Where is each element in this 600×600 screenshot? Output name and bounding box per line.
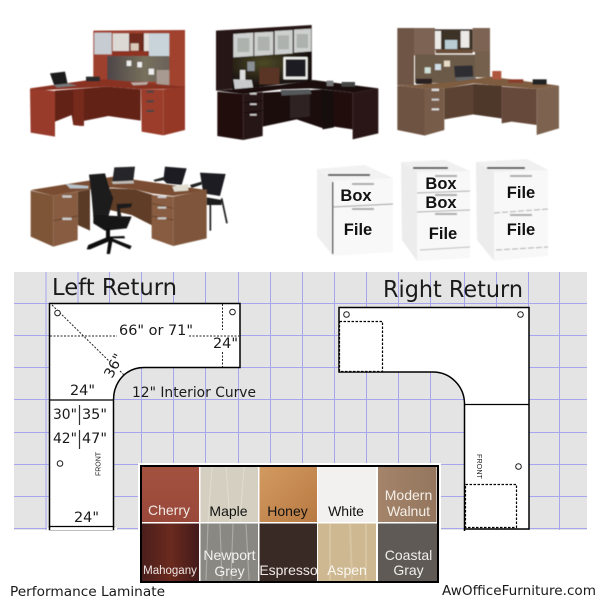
- swatch: Espresso: Espresso: [259, 562, 318, 578]
- swatch: White: White: [328, 503, 364, 519]
- swatch: Aspen: Aspen: [327, 562, 367, 578]
- heading: Left Return: Left Return: [52, 275, 177, 301]
- photo: white pedestal file/file: File: [507, 184, 535, 202]
- photo: cherry L-desk with hutch: [30, 30, 185, 137]
- swatch: Honey: [260, 467, 317, 522]
- swatch: Coastal Gray: [378, 524, 437, 581]
- swatch: Coastal Gray: Gray: [393, 562, 424, 578]
- swatch: Mahogany: [142, 524, 199, 581]
- panel: laminate colour swatches: [138, 463, 441, 583]
- label: diagonal: 36": [101, 351, 127, 381]
- photo: white pedestal box/box/file: [401, 160, 470, 261]
- swatch: Maple: [200, 467, 258, 522]
- photo: white pedestal box/file: Box: [340, 187, 372, 205]
- swatch: Espresso: [259, 524, 318, 581]
- label: front: FRONT: [475, 454, 484, 479]
- photo: walnut L-desk with hutch: [397, 28, 559, 136]
- swatch: Newport Grey: Newport: [203, 547, 256, 563]
- caption: website: AwOfficeFurniture.com: [442, 584, 596, 599]
- swatch: Newport Grey: [200, 524, 258, 581]
- photo: espresso L-desk with hutch: [216, 25, 378, 140]
- swatch: Aspen: [318, 524, 376, 581]
- swatch: Cherry: [142, 467, 199, 522]
- label: width: 66" or 71": [119, 323, 193, 339]
- label: 35 inch: 35": [82, 407, 107, 423]
- label: main depth: 24": [70, 383, 95, 399]
- swatch: Modern Walnut: Walnut: [387, 503, 430, 519]
- diagram: right return desk plan: [339, 308, 529, 531]
- floor plan grid background: [14, 272, 587, 530]
- swatch: Modern Walnut: Modern: [385, 487, 432, 503]
- swatch: White: [318, 467, 376, 522]
- label: 30 inch: 30": [53, 407, 77, 423]
- label: 42 inch: 42": [53, 431, 77, 447]
- heading: Right Return: Right Return: [383, 277, 523, 303]
- label: return depth: 24": [213, 336, 238, 352]
- label: bottom depth: 24": [74, 510, 99, 526]
- caption: Performance Laminate: Performance Laminate: [10, 585, 165, 600]
- label: front: FRONT: [94, 452, 102, 476]
- swatch: Newport Grey: Grey: [214, 563, 245, 579]
- label: interior curve: 12" Interior Curve: [132, 385, 256, 401]
- photo: white pedestal box/box/file: Box: [425, 175, 457, 193]
- swatch: Honey: Honey: [267, 503, 308, 519]
- photo: white pedestal box/box/file: File: [429, 225, 457, 243]
- swatch: Modern Walnut: [378, 467, 436, 522]
- swatch: Cherry: Cherry: [148, 502, 190, 518]
- photo: white pedestal box/file: File: [344, 221, 372, 239]
- swatch: Coastal Gray: Coastal: [385, 547, 432, 563]
- diagram: left return desk plan: [47, 304, 256, 530]
- photo: white pedestal file/file: [476, 159, 548, 261]
- swatch: Mahogany: Mahogany: [143, 565, 197, 577]
- photo: walnut bow-front desk with chairs: [31, 167, 227, 254]
- photo: white pedestal file/file: File: [507, 221, 535, 239]
- label: 47 inch: 47": [82, 431, 107, 447]
- photo: white pedestal box/box/file: Box: [425, 194, 457, 212]
- photo: white pedestal box/file: [317, 165, 393, 256]
- swatch: Maple: Maple: [209, 503, 248, 519]
